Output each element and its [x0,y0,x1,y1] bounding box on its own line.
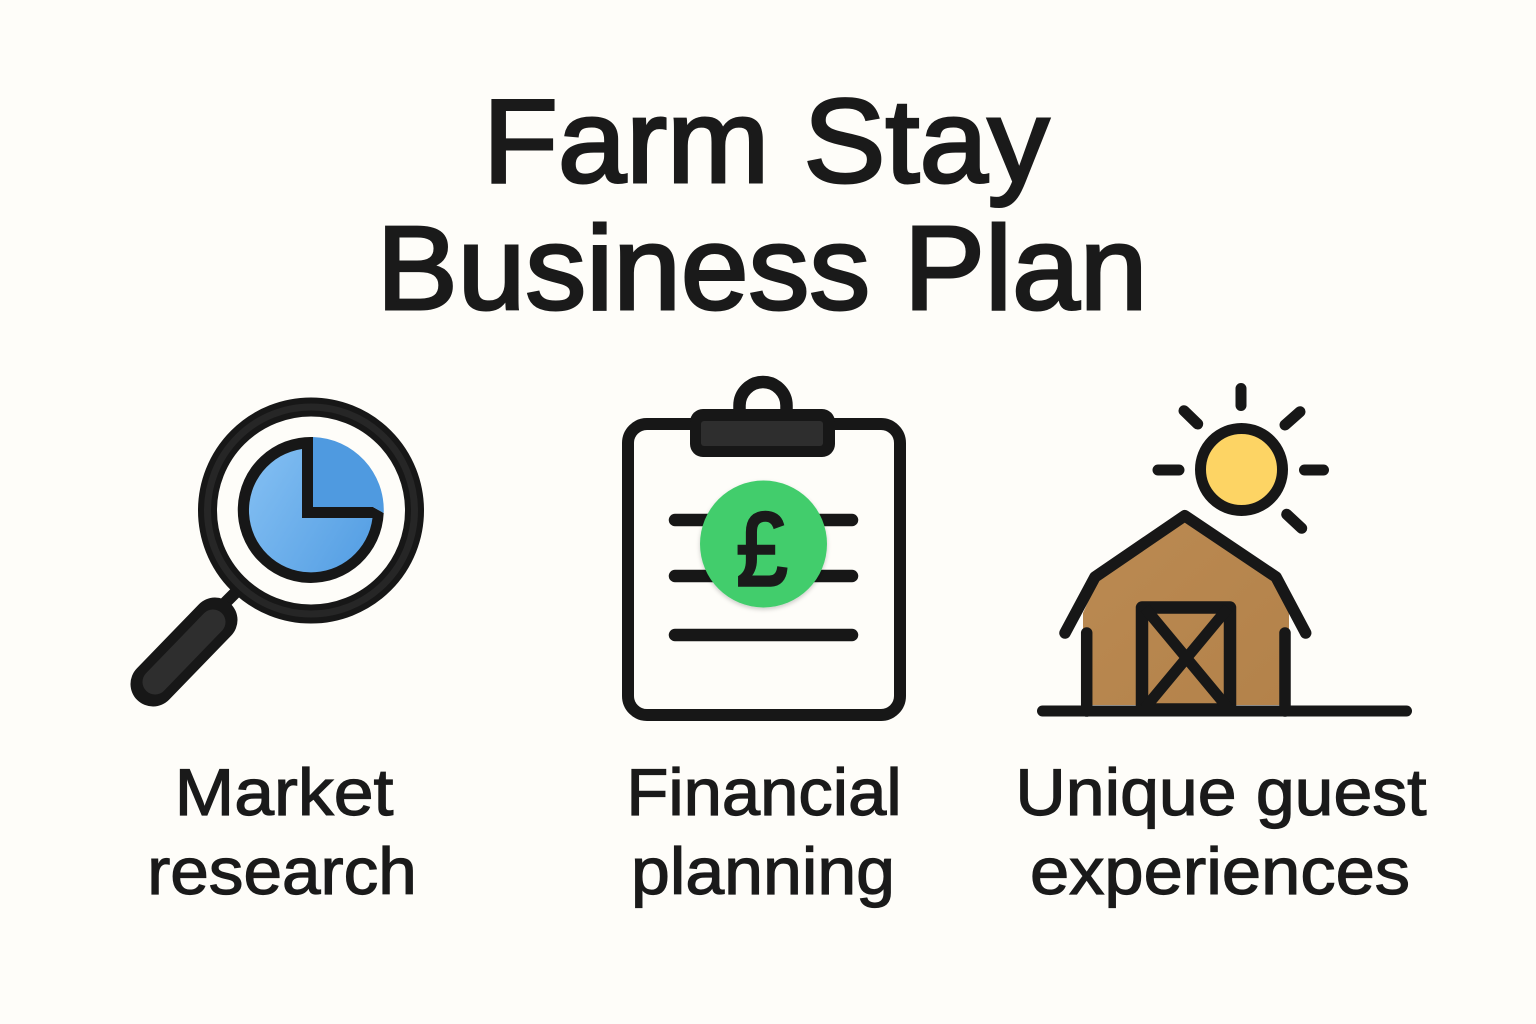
label: market research: research [147,834,417,908]
label: market research: Market [174,755,393,829]
icon: magnifying glass with pie chart [153,407,414,684]
icon: clipboard with pound coin [628,382,900,715]
icon: clipboard with pound coin: £ [737,491,787,607]
title [377,75,1147,335]
label: financial planning: planning [630,834,895,908]
label: unique guest experiences: Unique guest [1015,755,1426,829]
title: Farm Stay [483,75,1049,208]
icon: barn with sun [1042,388,1406,711]
label: unique guest experiences [1015,755,1427,908]
title: Business Plan [377,202,1147,335]
label: market research [147,755,417,908]
label: financial planning [626,755,901,908]
label: financial planning: Financial [626,755,901,829]
label: unique guest experiences: experiences [1030,834,1410,908]
